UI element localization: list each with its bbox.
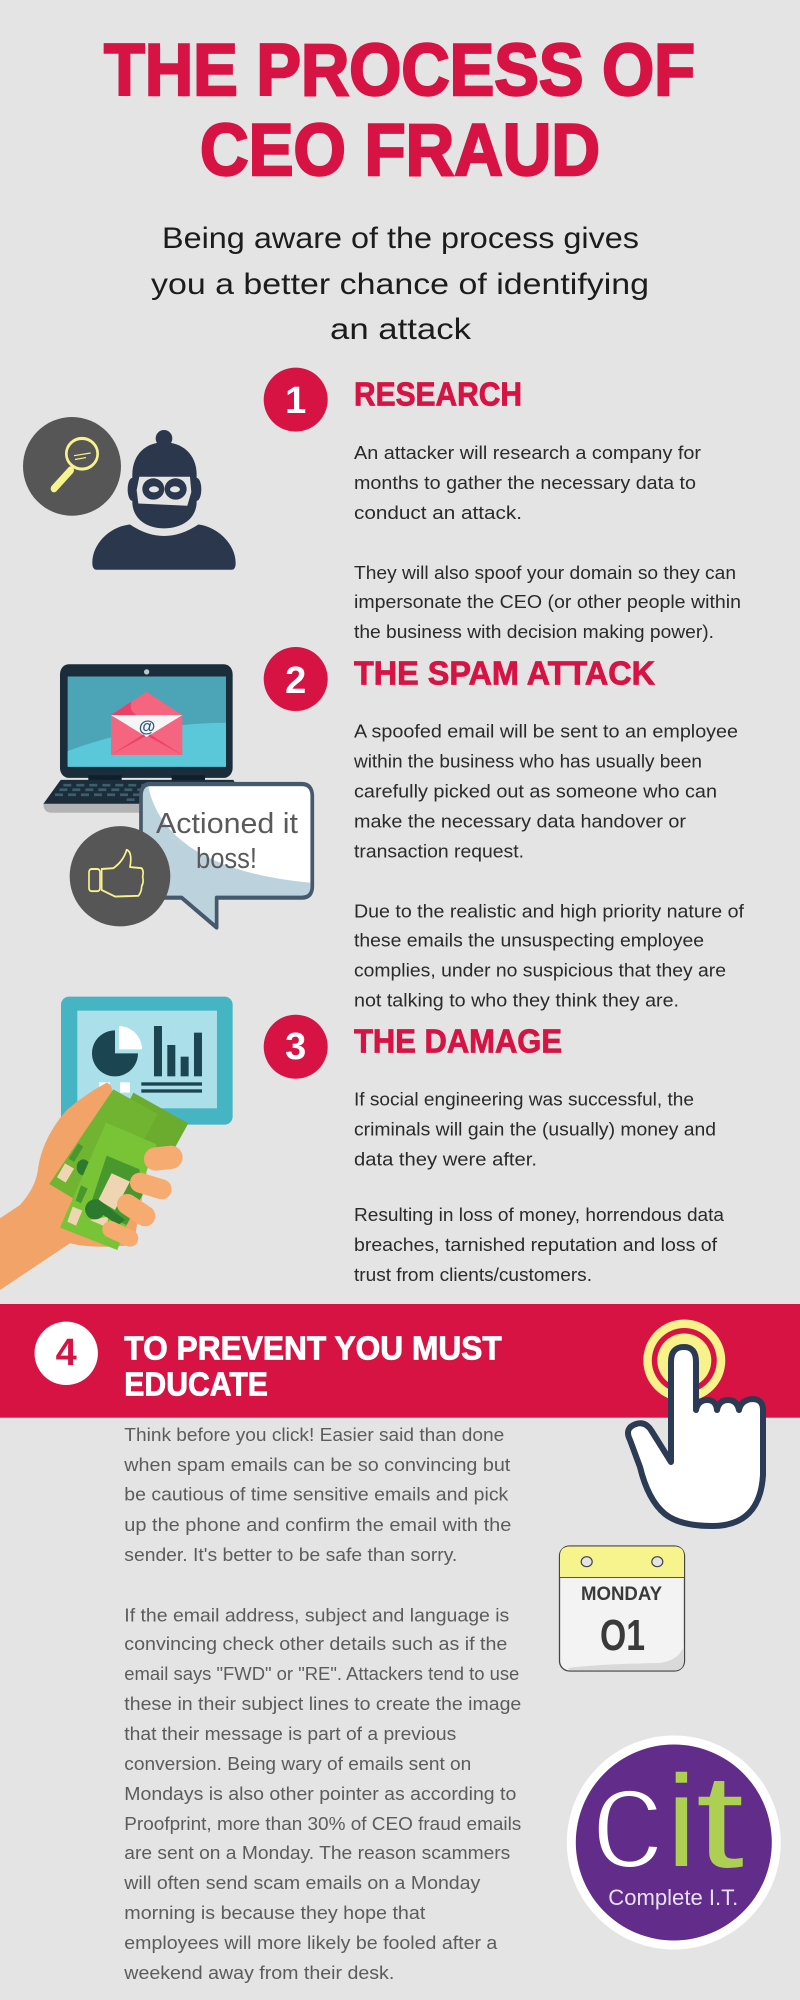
step 3 body text: If social engineering was successful, the: [354, 1090, 694, 1110]
step 1 body text: An attacker will research a company for: [354, 443, 701, 463]
icon: calendar Monday 01: [560, 1546, 684, 1671]
step 2 body text: [353, 721, 745, 1011]
prevention body text: that their message is part of a previous: [124, 1724, 456, 1744]
prevention body text: Proofprint, more than 30% of CEO fraud emails: [124, 1814, 521, 1834]
step 3 number badge: 3: [285, 1026, 306, 1068]
step 1 body text: They will also spoof your domain so they can: [354, 563, 736, 583]
icon: pointing hand clicking: [628, 1320, 763, 1526]
prevention body text: Mondays is also other pointer as according to: [124, 1784, 516, 1804]
icon: calendar Monday 01: MONDAY: [581, 1584, 662, 1605]
step 3 body text: data they were after.: [354, 1150, 537, 1170]
step 4 number badge: [34, 1322, 98, 1385]
callout: speech bubble with thumbs up: boss!: [196, 843, 257, 875]
step 2 number badge: [264, 647, 328, 711]
prevention body text: conversion. Being wary of emails sent on: [124, 1754, 471, 1774]
step 1 body text: impersonate the CEO (or other people within: [354, 592, 741, 612]
step 4 number badge: 4: [56, 1332, 77, 1374]
step 2 body text: make the necessary data handover or: [354, 811, 686, 831]
icon: calendar Monday 01: O1: [600, 1611, 645, 1660]
prevention body text: email says "FWD" or "RE". Attackers tend to use: [124, 1664, 519, 1684]
icon: laptop with email: [43, 664, 248, 813]
step 3 body text: breaches, tarnished reputation and loss of: [354, 1235, 718, 1255]
prevention body text: morning is because they hope that: [124, 1903, 425, 1923]
icon: tablet with charts and hand holding money: [0, 997, 233, 1290]
prevention body text: Think before you click! Easier said than done: [124, 1425, 504, 1445]
title: CEO FRAUD: [200, 110, 600, 191]
prevention body text: will often send scam emails on a Monday: [123, 1873, 480, 1893]
step 2 body text: transaction request.: [354, 841, 524, 861]
step 2 body text: these emails the unsuspecting employee: [354, 931, 704, 951]
banner heading: TO PREVENT YOU MUST: [124, 1329, 502, 1366]
step 2 body text: carefully picked out as someone who can: [354, 781, 717, 801]
step 3 heading: THE DAMAGE: [354, 1023, 562, 1060]
subtitle: you a better chance of identifying: [151, 268, 649, 301]
step 2 heading: THE SPAM ATTACK: [354, 654, 655, 691]
step 3 body text: criminals will gain the (usually) money and: [354, 1120, 716, 1140]
prevention body text: employees will more likely be fooled after a: [124, 1933, 498, 1953]
step 1 body text: months to gather the necessary data to: [354, 473, 696, 493]
prevention body text: convincing check other details such as if the: [124, 1634, 507, 1654]
subtitle: an attack: [330, 313, 472, 346]
step 2 body text: within the business who has usually been: [353, 751, 702, 771]
icon: laptop with email: @: [139, 717, 155, 736]
step 3 number badge: [264, 1015, 328, 1079]
step 1 number badge: [264, 368, 328, 432]
icon: magnifying glass and thief: [23, 417, 236, 570]
banner: prevention header: [0, 1304, 800, 1418]
callout: speech bubble with thumbs up: Actioned it: [156, 808, 298, 840]
prevention body text: weekend away from their desk.: [123, 1963, 394, 1983]
step 2 body text: Due to the realistic and high priority nature of: [354, 901, 745, 921]
subtitle: Being aware of the process gives: [162, 222, 639, 255]
title: [104, 30, 695, 191]
step 2 body text: complies, under no suspicious that they are: [354, 961, 726, 981]
step 3 body text: [354, 1090, 725, 1285]
prevention body text: these in their subject lines to create the image: [124, 1694, 521, 1714]
banner heading: [124, 1329, 502, 1402]
prevention body text: when spam emails can be so convincing but: [123, 1455, 510, 1475]
step 2 body text: A spoofed email will be sent to an employee: [354, 721, 738, 741]
step 1 body text: the business with decision making power).: [354, 622, 714, 642]
prevention body text: sender. It's better to be safe than sorry.: [124, 1545, 457, 1565]
step 1 number badge: 1: [285, 380, 306, 422]
step 1 body text: [354, 443, 741, 642]
prevention body text: If the email address, subject and language is: [124, 1606, 509, 1626]
logo: Complete I.T.: [567, 1735, 781, 1950]
step 3 body text: trust from clients/customers.: [354, 1265, 592, 1285]
logo: Complete I.T.: i: [667, 1748, 696, 1894]
logo: Complete I.T.: Complete I.T.: [608, 1885, 738, 1910]
logo: Complete I.T.: t: [696, 1748, 744, 1896]
step 2 number badge: 2: [285, 660, 306, 702]
step 1 body text: conduct an attack.: [354, 503, 522, 523]
prevention body text: [123, 1425, 521, 1983]
callout: speech bubble with thumbs up: [70, 784, 312, 928]
banner heading: EDUCATE: [124, 1365, 268, 1402]
subtitle: [151, 222, 649, 346]
prevention body text: up the phone and confirm the email with the: [124, 1515, 511, 1535]
prevention body text: are sent on a Monday. The reason scammers: [124, 1843, 510, 1863]
logo: Complete I.T.: c: [590, 1735, 664, 1900]
step 2 body text: not talking to who they think they are.: [354, 991, 679, 1011]
step 1 heading: RESEARCH: [354, 376, 522, 413]
title: THE PROCESS OF: [104, 30, 695, 111]
prevention body text: be cautious of time sensitive emails and pick: [124, 1485, 509, 1505]
step 3 body text: Resulting in loss of money, horrendous data: [354, 1205, 725, 1225]
